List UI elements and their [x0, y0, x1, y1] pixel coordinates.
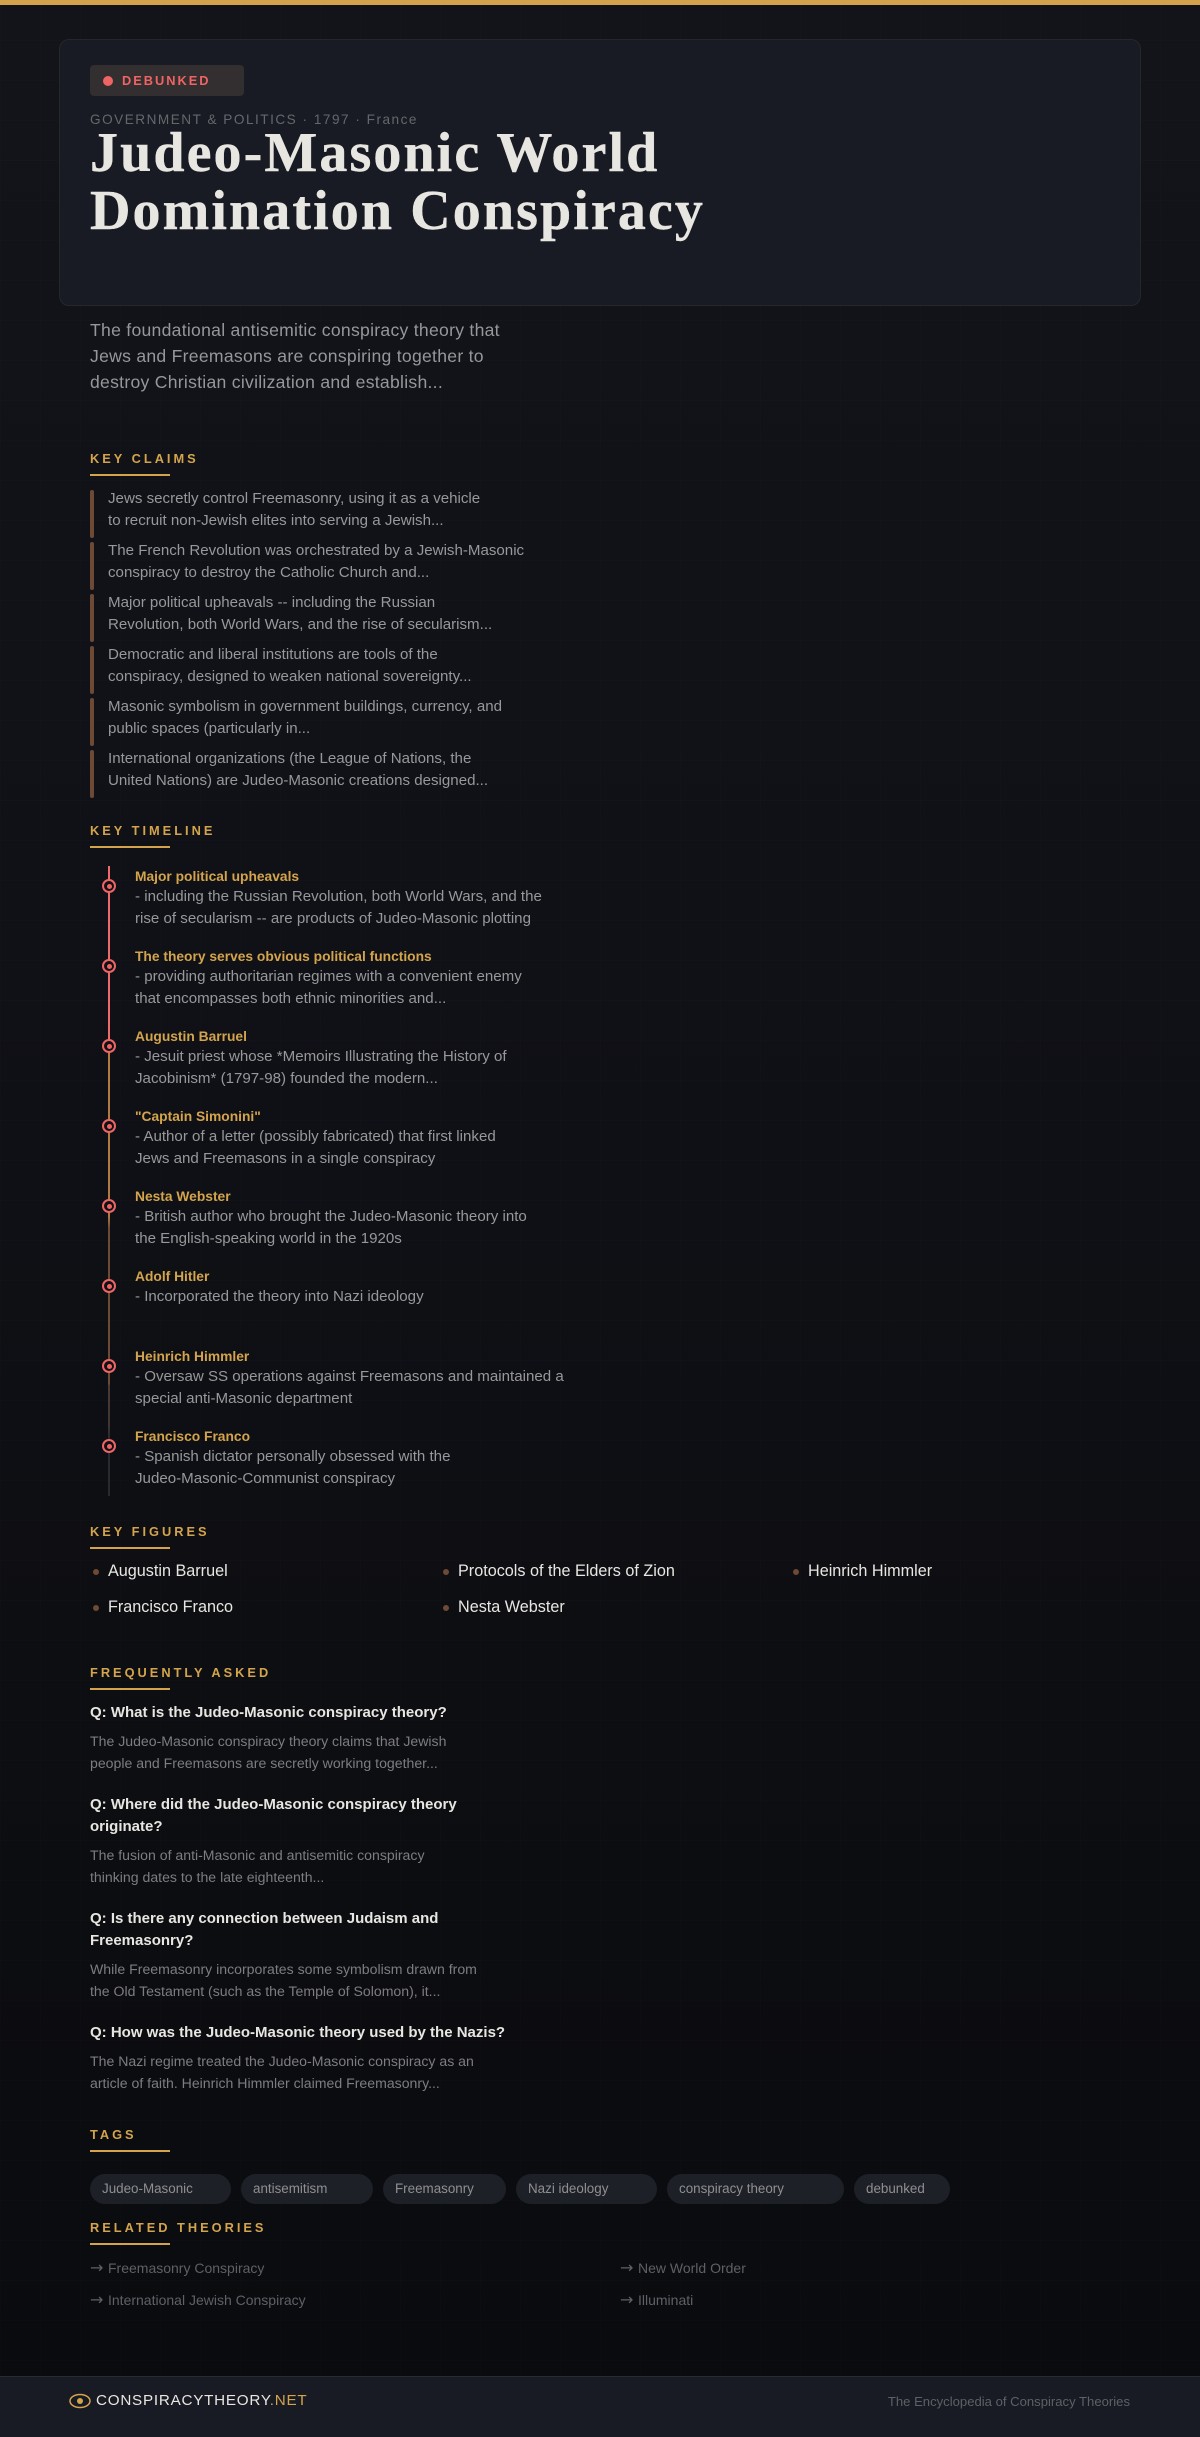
link: New World Order: →	[620, 2258, 633, 2277]
event 7: special anti-Masonic department	[135, 1390, 352, 1407]
claim 6: United Nations) are Judeo-Masonic creations designed...	[108, 772, 488, 789]
title	[90, 122, 705, 242]
link: International Jewish Conspiracy: →	[90, 2290, 103, 2309]
link: International Jewish Conspiracy: International Jewish Conspiracy	[108, 2292, 306, 2308]
claim 3: Major political upheavals -- including the Russian	[108, 594, 435, 611]
link: Freemasonry Conspiracy: →	[90, 2258, 103, 2277]
logo	[69, 2392, 307, 2409]
event 3	[102, 1029, 507, 1087]
tag: Judeo-Masonic	[102, 2181, 193, 2196]
event 2: The theory serves obvious political functions	[135, 949, 432, 964]
link: Freemasonry Conspiracy: Freemasonry Conspiracy	[108, 2260, 264, 2276]
claim 6: International organizations (the League of Nations, the	[108, 750, 471, 767]
event 7	[102, 1349, 564, 1407]
faq 2	[90, 1796, 457, 1885]
tagline: The Encyclopedia of Conspiracy Theories	[888, 2394, 1130, 2409]
faq 4: The Nazi regime treated the Judeo-Masonic conspiracy as an	[90, 2053, 474, 2069]
tag: debunked	[866, 2181, 925, 2196]
title: Domination Conspiracy	[90, 180, 705, 242]
tag: antisemitism	[253, 2181, 327, 2196]
event 4: - Author of a letter (possibly fabricated) that first linked	[135, 1128, 496, 1145]
claim 2: conspiracy to destroy the Catholic Church and...	[108, 564, 429, 581]
link: Illuminati	[620, 2290, 693, 2309]
figure: Francisco Franco: Francisco Franco	[108, 1598, 233, 1616]
faq 3: the Old Testament (such as the Temple of Solomon), it...	[90, 1983, 440, 1999]
tag list	[90, 2174, 950, 2204]
event 8	[102, 1429, 450, 1487]
claim 3	[90, 594, 492, 642]
summary text: Jews and Freemasons are conspiring together to	[90, 346, 484, 366]
event 5	[102, 1189, 527, 1247]
panel: hero header	[59, 39, 1141, 306]
summary text: destroy Christian civilization and establish...	[90, 372, 443, 392]
heading: related theories: RELATED THEORIES	[90, 2220, 266, 2235]
faq 2: The fusion of anti-Masonic and antisemitic conspiracy	[90, 1847, 424, 1863]
event 8: - Spanish dictator personally obsessed with the	[135, 1448, 450, 1465]
summary text	[90, 320, 500, 392]
event 3: Augustin Barruel	[135, 1029, 247, 1044]
heading: key claims: KEY CLAIMS	[90, 451, 199, 466]
faq 3: Q: Is there any connection between Judaism and	[90, 1910, 438, 1927]
event 1: rise of secularism -- are products of Judeo-Masonic plotting	[135, 910, 531, 927]
tag: conspiracy theory	[679, 2181, 784, 2196]
faq 4: Q: How was the Judeo-Masonic theory used by the Nazis?	[90, 2024, 505, 2041]
event 5: the English-speaking world in the 1920s	[135, 1230, 402, 1247]
icon: eye	[69, 2394, 91, 2408]
event 1: Major political upheavals	[135, 869, 299, 884]
claim 5: public spaces (particularly in...	[108, 720, 310, 737]
heading: key figures: KEY FIGURES	[90, 1524, 210, 1539]
event 5: Nesta Webster	[135, 1189, 231, 1204]
event 3: - Jesuit priest whose *Memoirs Illustrating the History of	[135, 1048, 507, 1065]
panel: key figures	[90, 1524, 932, 1616]
figure: Protocols of the Elders of Zion: Protocols of the Elders of Zion	[458, 1562, 675, 1580]
faq 3: Freemasonry?	[90, 1932, 193, 1949]
tag	[516, 2174, 657, 2204]
title: Judeo-Masonic World	[90, 122, 659, 184]
event 3: Jacobinism* (1797-98) founded the modern...	[135, 1070, 438, 1087]
tag	[241, 2174, 373, 2204]
event 2	[102, 949, 522, 1007]
event 6	[102, 1269, 424, 1305]
panel: tags	[90, 2127, 950, 2204]
faq 1	[90, 1704, 447, 1771]
tag: Freemasonry	[395, 2181, 474, 2196]
claim 5	[90, 698, 502, 746]
panel: related theories	[90, 2220, 746, 2309]
heading: key timeline: KEY TIMELINE	[90, 823, 215, 838]
claim 6	[90, 750, 488, 798]
faq 1: The Judeo-Masonic conspiracy theory claims that Jewish	[90, 1733, 446, 1749]
claim 4	[90, 646, 472, 694]
tag	[383, 2174, 506, 2204]
heading: frequently asked: FREQUENTLY ASKED	[90, 1665, 271, 1680]
timeline line	[108, 866, 110, 1496]
panel: frequently asked	[90, 1665, 505, 2091]
faq 3: While Freemasonry incorporates some symbolism drawn from	[90, 1961, 477, 1977]
faq 2: originate?	[90, 1818, 163, 1835]
status badge: debunked	[90, 65, 244, 96]
figure: Heinrich Himmler: Heinrich Himmler	[808, 1562, 932, 1580]
event 7: Heinrich Himmler	[135, 1349, 249, 1364]
faq 2: Q: Where did the Judeo-Masonic conspiracy theory	[90, 1796, 457, 1813]
event 4: "Captain Simonini"	[135, 1109, 261, 1124]
event 1: - including the Russian Revolution, both World Wars, and the	[135, 888, 542, 905]
link: Illuminati: →	[620, 2290, 633, 2309]
tag	[667, 2174, 844, 2204]
event 2: that encompasses both ethnic minorities and...	[135, 990, 446, 1007]
claim 4: Democratic and liberal institutions are tools of the	[108, 646, 438, 663]
claim 1: to recruit non-Jewish elites into serving a Jewish...	[108, 512, 444, 529]
claim 4: conspiracy, designed to weaken national sovereignty...	[108, 668, 472, 685]
claim 2	[90, 542, 524, 590]
event 4: Jews and Freemasons in a single conspiracy	[135, 1150, 435, 1167]
footer	[0, 2376, 1200, 2437]
claim 1	[90, 490, 480, 538]
figure: Nesta Webster: Nesta Webster	[458, 1598, 565, 1616]
tag	[90, 2174, 231, 2204]
figure: Augustin Barruel: Augustin Barruel	[108, 1562, 228, 1580]
event 7: - Oversaw SS operations against Freemasons and maintained a	[135, 1368, 564, 1385]
panel: key timeline	[90, 823, 564, 1496]
faq 1: Q: What is the Judeo-Masonic conspiracy theory?	[90, 1704, 447, 1721]
brand name: CONSPIRACYTHEORY.NET	[96, 2392, 307, 2409]
faq 1: people and Freemasons are secretly working together...	[90, 1755, 438, 1771]
panel: key claims	[90, 451, 524, 798]
icon: status dot	[103, 76, 113, 86]
event 8: Judeo-Masonic-Communist conspiracy	[135, 1470, 395, 1487]
heading: tags: TAGS	[90, 2127, 137, 2142]
meta line: GOVERNMENT & POLITICS · 1797 · France	[90, 112, 418, 127]
claim 3: Revolution, both World Wars, and the rise of secularism...	[108, 616, 492, 633]
badge label: DEBUNKED	[122, 73, 211, 88]
faq 4: article of faith. Heinrich Himmler claimed Freemasonry...	[90, 2075, 440, 2091]
event 6: - Incorporated the theory into Nazi ideology	[135, 1288, 424, 1305]
event 4	[102, 1109, 496, 1167]
event 5: - British author who brought the Judeo-Masonic theory into	[135, 1208, 527, 1225]
claim 5: Masonic symbolism in government buildings, currency, and	[108, 698, 502, 715]
tag	[854, 2174, 950, 2204]
event 8: Francisco Franco	[135, 1429, 250, 1444]
event 6: Adolf Hitler	[135, 1269, 209, 1284]
claim 2: The French Revolution was orchestrated by a Jewish-Masonic	[108, 542, 524, 559]
event 2: - providing authoritarian regimes with a convenient enemy	[135, 968, 522, 985]
event 1	[102, 869, 542, 927]
faq 3	[90, 1910, 477, 1999]
tag: Nazi ideology	[528, 2181, 608, 2196]
faq 2: thinking dates to the late eighteenth...	[90, 1869, 324, 1885]
link: New World Order: New World Order	[638, 2260, 746, 2276]
link: Illuminati: Illuminati	[638, 2292, 693, 2308]
summary text: The foundational antisemitic conspiracy theory that	[90, 320, 500, 340]
faq 4	[90, 2024, 505, 2091]
claim 1: Jews secretly control Freemasonry, using it as a vehicle	[108, 490, 480, 507]
